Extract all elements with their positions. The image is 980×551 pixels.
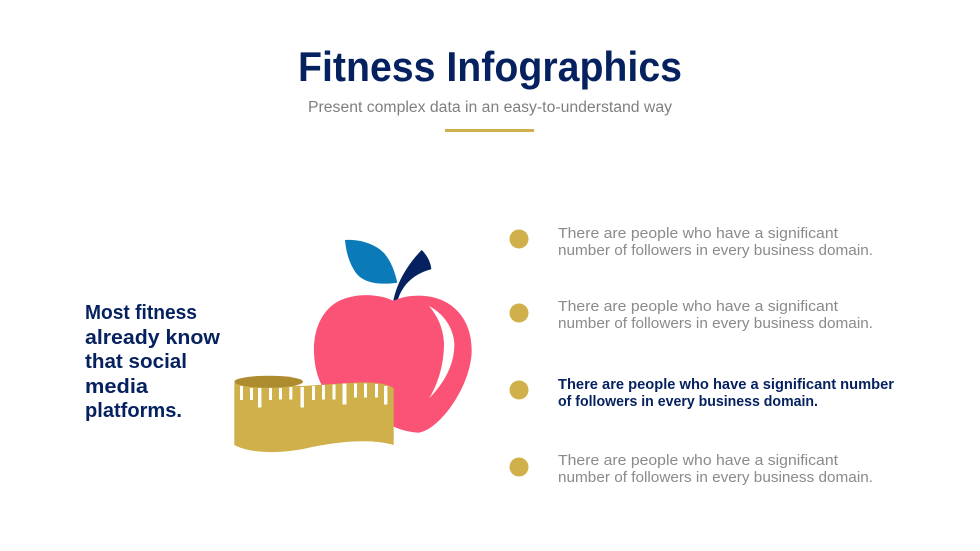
bullet 2	[510, 304, 528, 322]
item 3 text: of followers in every business domain.	[558, 394, 818, 410]
illustration: apple and measuring tape	[234, 240, 472, 452]
item 2 text	[558, 298, 873, 332]
bullet 4	[510, 458, 528, 476]
list item 4	[510, 452, 873, 486]
item 2 text: number of followers in every business domain.	[558, 315, 873, 332]
item 4 text: number of followers in every business domain.	[558, 469, 873, 486]
item 2 text: There are people who have a significant	[558, 298, 839, 315]
icon: measuring tape	[234, 376, 394, 452]
bullet 1	[510, 230, 528, 248]
title underline	[445, 129, 534, 132]
left statement: Most fitness	[85, 301, 197, 324]
icon: apple	[314, 295, 472, 433]
left statement	[85, 301, 220, 422]
item 1 text: There are people who have a significant	[558, 225, 839, 242]
left statement: that social	[85, 350, 187, 373]
bullet 3	[510, 380, 528, 400]
item 1 text: number of followers in every business domain.	[558, 242, 873, 259]
icon: apple highlight	[429, 306, 454, 398]
list item 2	[510, 298, 873, 332]
item 1 text	[558, 225, 873, 259]
item 4 text: There are people who have a significant	[558, 452, 839, 469]
left statement: platforms.	[85, 399, 182, 422]
icon: leaf	[345, 240, 397, 284]
item 3 text: There are people who have a significant number	[558, 377, 894, 393]
left statement: media	[85, 375, 149, 398]
list item 1	[510, 225, 873, 259]
icon: apple stem	[393, 250, 431, 301]
list item 3 highlighted	[510, 377, 894, 410]
item 3 text	[558, 377, 894, 410]
item 4 text	[558, 452, 873, 486]
left statement: already know	[85, 326, 220, 349]
title: Fitness Infographics	[298, 43, 682, 90]
subtitle: Present complex data in an easy-to-understand way	[308, 99, 672, 116]
